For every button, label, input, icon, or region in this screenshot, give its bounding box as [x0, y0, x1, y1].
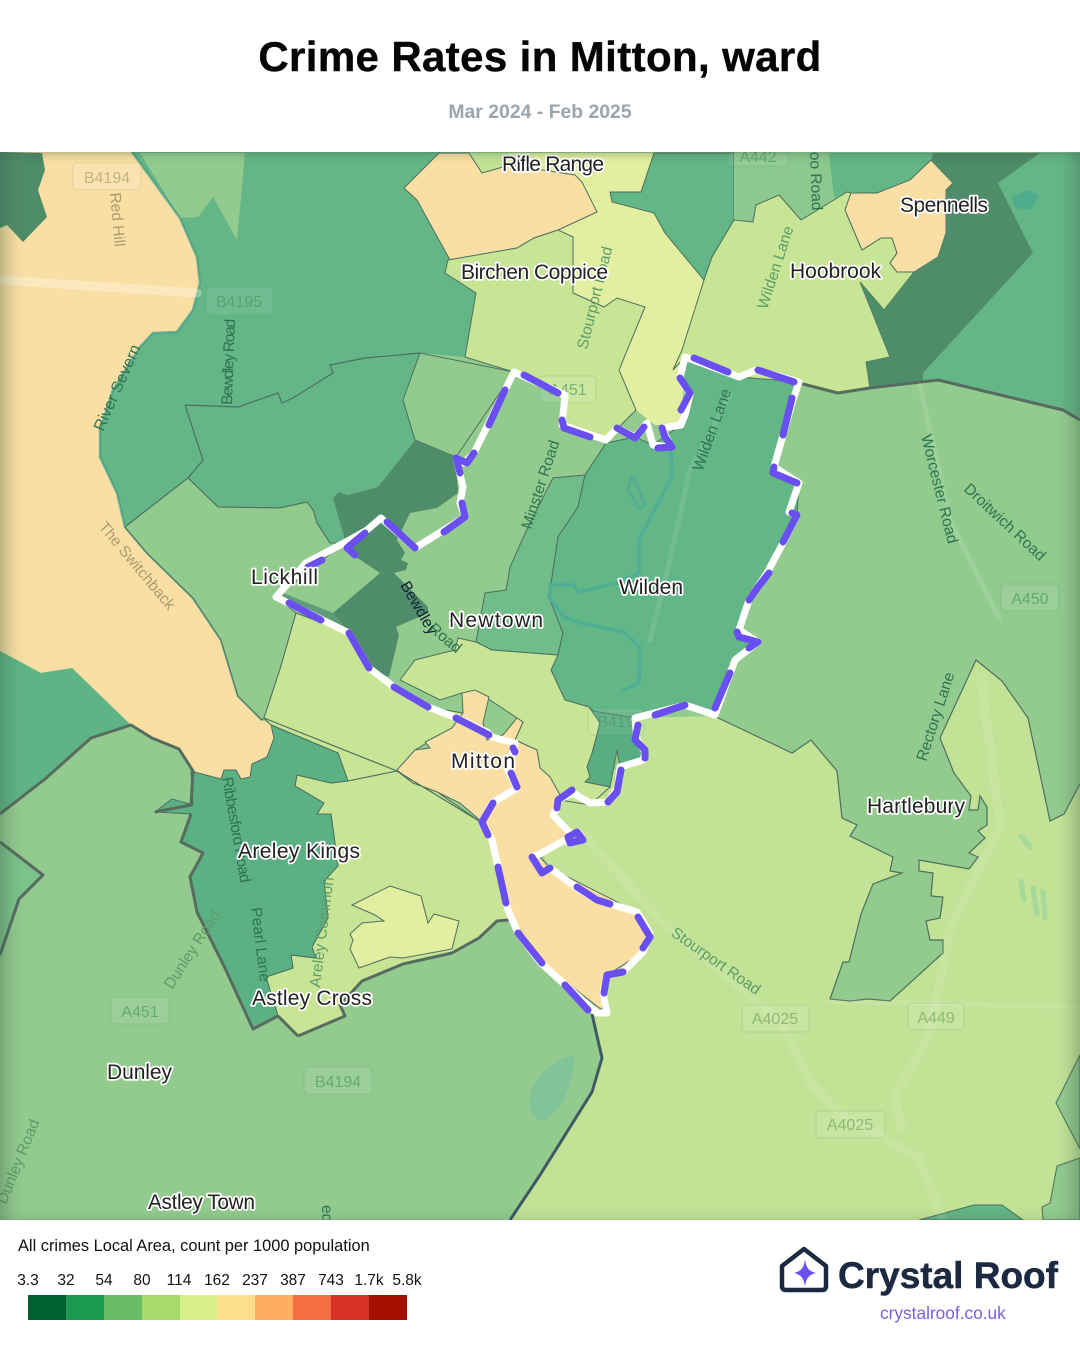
- legend scale values: 387: [280, 1272, 306, 1289]
- brand url: crystalroof.co.uk: [880, 1303, 1006, 1323]
- road name labels: Red Hill: [106, 192, 128, 247]
- road name labels: Minster Road: [519, 438, 563, 531]
- road name labels: Wilden Lane: [755, 224, 797, 311]
- road name labels: The Switchback: [95, 519, 178, 614]
- road shields: A449: [917, 1010, 955, 1027]
- road name labels: Dunley Road: [161, 908, 224, 992]
- map edge vignette: [0, 152, 1080, 1220]
- place name labels: Areley Kings: [238, 840, 360, 863]
- road name labels: Bewdley Road: [219, 319, 239, 405]
- ward boundary: purple dashes: [289, 358, 797, 1010]
- road shields: B4194: [84, 170, 130, 187]
- place name labels: Hartlebury: [867, 795, 966, 818]
- road shields: B4194: [315, 1074, 361, 1091]
- road shields: B4195: [216, 294, 262, 311]
- road name labels: Road: [425, 620, 465, 657]
- legend scale values: 32: [57, 1272, 75, 1289]
- title: Crime Rates in Mitton, ward: [258, 33, 822, 80]
- place name labels: Mitton: [451, 750, 515, 773]
- legend scale values: 80: [133, 1272, 151, 1289]
- brand name: Crystal Roof: [838, 1255, 1058, 1296]
- place name labels: Rifle Range: [502, 153, 604, 176]
- place name labels: Lickhill: [251, 566, 318, 589]
- place name labels: [107, 153, 988, 1214]
- road name labels: Wilden Lane: [690, 387, 735, 473]
- ward boundary: white line: [276, 357, 799, 1013]
- legend title: All crimes Local Area, count per 1000 population: [18, 1237, 370, 1255]
- road shields: A4025: [827, 1117, 873, 1134]
- icon: Crystal Roof house logo: [780, 1246, 828, 1292]
- area polygons: [0, 152, 1080, 1220]
- road name labels: Rectory Lane: [914, 670, 958, 763]
- place name labels: Dunley: [107, 1061, 172, 1084]
- legend scale values: 743: [318, 1272, 344, 1289]
- place name labels: Astley Town: [148, 1191, 255, 1214]
- place name labels: Spennells: [900, 194, 988, 217]
- legend scale values: 3.3: [17, 1272, 39, 1289]
- legend scale values: 1.7k: [354, 1272, 384, 1289]
- road name labels: River Severn: [91, 342, 144, 434]
- road name labels: Ribbesford Road: [218, 776, 253, 884]
- roads: [0, 280, 1080, 1220]
- road name labels: [0, 152, 1049, 1222]
- legend colour scale: [28, 1295, 407, 1320]
- road shields: [73, 149, 1059, 1138]
- road name labels: Droitwich Road: [960, 480, 1049, 565]
- place name labels: Hoobrook: [790, 260, 882, 283]
- place name labels: Wilden: [619, 576, 683, 599]
- date range subtitle: Mar 2024 - Feb 2025: [448, 101, 632, 123]
- road shields: A451: [549, 382, 587, 399]
- legend scale values: [17, 1272, 422, 1289]
- road name labels: Bewdley: [397, 578, 441, 638]
- water: river and ponds: [530, 450, 1045, 1120]
- road name labels: Areley Common: [307, 876, 338, 988]
- road name labels: Pearl Lane: [247, 906, 273, 983]
- legend scale values: 54: [95, 1272, 113, 1289]
- legend scale values: 162: [204, 1272, 230, 1289]
- thick boundary lines: [0, 380, 1080, 1220]
- road name labels: Stourport Road: [668, 924, 764, 999]
- place name labels: Birchen Coppice: [461, 261, 608, 284]
- road shields: B419: [597, 714, 635, 731]
- legend scale values: 5.8k: [392, 1272, 422, 1289]
- base map area: [0, 152, 1080, 1220]
- road name labels: Worcester Road: [917, 433, 961, 545]
- legend scale values: 237: [242, 1272, 268, 1289]
- legend scale values: 114: [167, 1272, 191, 1289]
- road shields: A451: [121, 1004, 159, 1021]
- legend and branding footer: [0, 1220, 1080, 1350]
- road name labels: Stourport Road: [574, 245, 616, 351]
- road shields: A450: [1011, 591, 1049, 608]
- road name labels: oo Road: [806, 152, 825, 211]
- road shields: A4025: [752, 1011, 798, 1028]
- place name labels: Astley Cross: [252, 987, 372, 1010]
- place name labels: Newtown: [449, 609, 543, 632]
- choropleth map panel: [0, 152, 1080, 1220]
